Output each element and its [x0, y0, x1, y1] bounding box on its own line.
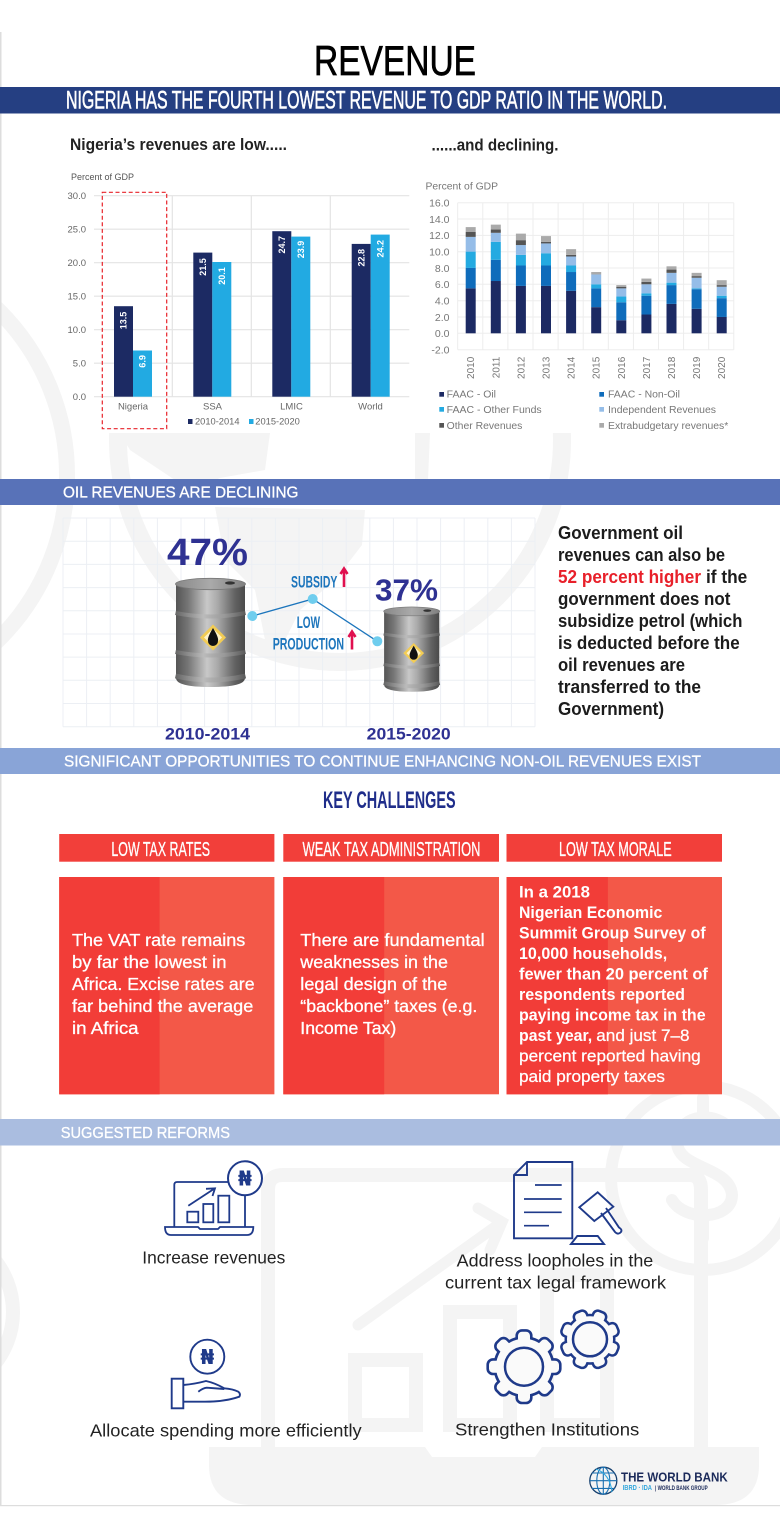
label: subsidy: SUBSIDY [291, 572, 338, 591]
stacked bar chart: revenue composition 2010-2020: 2011 [491, 356, 502, 378]
bar chart: revenues percent of GDP by region [68, 172, 409, 426]
panel: low tax morale: Nigerian Economic [519, 903, 662, 922]
logo: The World Bank: | WORLD BANK GROUP [655, 1486, 708, 1492]
bar chart: revenues percent of GDP by region: 24.7 [277, 236, 288, 254]
text block: petrol subsidy note: is deducted before the [558, 633, 740, 653]
stacked bar chart: revenue composition 2010-2020: 2010 [466, 356, 477, 379]
panel: low tax morale: paid property taxes [519, 1067, 665, 1086]
subheading: declining: ......and declining. [432, 136, 558, 154]
bar chart: revenues percent of GDP by region: 22.8 [356, 249, 367, 266]
label: address loopholes: Address loopholes in the [457, 1251, 653, 1271]
panel: low tax rates: The VAT rate remains [72, 930, 246, 950]
text block: petrol subsidy note: if the [706, 567, 747, 587]
stacked bar chart: revenue composition 2010-2020: Percent of GDP [426, 180, 498, 192]
bar chart: revenues percent of GDP by region: 24.2 [375, 240, 386, 258]
oil revenue share graphic [165, 532, 451, 743]
bar chart: revenues percent of GDP by region: 15.0 [68, 292, 86, 302]
panel: weak tax administration: WEAK TAX ADMINISTRATION [302, 839, 480, 861]
panel: low tax morale [506, 834, 722, 1094]
panel: low tax morale: LOW TAX MORALE [559, 839, 672, 861]
bar chart: revenues percent of GDP by region: 23.9 [296, 241, 307, 258]
label: address loopholes: current tax legal framework [445, 1272, 666, 1292]
panel: low tax rates [59, 834, 274, 1094]
panel: low tax rates: by far the lowest in [72, 952, 226, 972]
panel: low tax morale: paying income tax in the [519, 1006, 706, 1025]
bar chart: revenues percent of GDP by region: 2010-2014 [195, 416, 240, 426]
text block: petrol subsidy note: Government oil [558, 523, 683, 543]
icon: laptop with rising chart: ₦ [238, 1166, 252, 1190]
bar chart: revenues percent of GDP by region: Nigeria [118, 402, 149, 413]
section banner: suggested reforms: SUGGESTED REFORMS [61, 1125, 230, 1142]
panel: low tax rates: Africa. Excise rates are [72, 974, 255, 994]
stat: 47 percent: 47% [167, 532, 248, 574]
text block: petrol subsidy note: 52 percent higher [558, 567, 701, 587]
stacked bar chart: revenue composition 2010-2020: 2012 [516, 356, 527, 379]
icon: gears [489, 1311, 618, 1402]
period label: 2015-2020: 2015-2020 [367, 724, 451, 743]
bar chart: revenues percent of GDP by region: 20.0 [68, 258, 86, 269]
icon: laptop with rising chart [165, 1161, 262, 1235]
stacked bar chart: revenue composition 2010-2020: FAAC - Oil [447, 390, 496, 400]
arrow: subsidy up [340, 568, 348, 587]
logo: The World Bank: THE WORLD BANK [621, 1470, 728, 1485]
icon: large oil barrel [176, 578, 246, 687]
stacked bar chart: revenue composition 2010-2020: 2017 [642, 356, 653, 379]
panel: low tax rates: LOW TAX RATES [111, 839, 210, 861]
stacked bar chart: revenue composition 2010-2020: FAAC - Other Funds [447, 405, 542, 416]
stacked bar chart: revenue composition 2010-2020: 2020 [717, 356, 728, 379]
period label: 2010-2014: 2010-2014 [165, 724, 251, 743]
icon: hand holding coin: ₦ [200, 1345, 214, 1369]
bar chart: revenues percent of GDP by region: LMIC [280, 402, 303, 413]
stacked bar chart: revenue composition 2010-2020 [426, 180, 734, 432]
stacked bar chart: revenue composition 2010-2020: 4.0 [435, 296, 450, 308]
panel: low tax morale: respondents reported [519, 985, 685, 1004]
bar chart: revenues percent of GDP by region: 2015-2020 [255, 416, 300, 426]
bar chart: revenues percent of GDP by region: 13.5 [119, 311, 130, 329]
label: address loopholes [445, 1251, 666, 1292]
icon: small oil barrel [384, 607, 440, 692]
stacked bar chart: revenue composition 2010-2020: 14.0 [429, 214, 450, 226]
text block: petrol subsidy note: transferred to the [558, 677, 701, 697]
label: low production [273, 613, 344, 653]
section banner: suggested reforms [0, 1119, 780, 1146]
bar chart: revenues percent of GDP by region: Percent of GDP [71, 172, 134, 183]
bar chart: revenues percent of GDP by region: 30.0 [68, 191, 86, 202]
panel: low tax morale: fewer than 20 percent of [519, 965, 708, 984]
stacked bar chart: revenue composition 2010-2020: Other Revenues [447, 421, 522, 432]
logo: The World Bank [590, 1467, 728, 1494]
bar chart: revenues percent of GDP by region: SSA [203, 402, 223, 413]
arrow: production up [348, 632, 356, 650]
icon: globe [590, 1467, 617, 1494]
stacked bar chart: revenue composition 2010-2020: 16.0 [429, 198, 450, 210]
bar chart: revenues percent of GDP by region: 21.5 [198, 258, 209, 276]
stacked bar chart: revenue composition 2010-2020: 2015 [592, 356, 603, 379]
callout: Nigeria dashed highlight [102, 192, 167, 429]
stacked bar chart: revenue composition 2010-2020: FAAC - Non-Oil [608, 390, 680, 400]
text block: petrol subsidy note: oil revenues are [558, 655, 685, 675]
panel: low tax rates: far behind the average [72, 996, 253, 1016]
panel: weak tax administration: legal design of the [300, 974, 447, 994]
stacked bar chart: revenue composition 2010-2020: 12.0 [429, 230, 450, 242]
stacked bar chart: revenue composition 2010-2020: 6.0 [435, 279, 450, 291]
stacked bar chart: revenue composition 2010-2020: 2018 [667, 356, 678, 379]
stacked bar chart: revenue composition 2010-2020: -2.0 [431, 344, 450, 356]
panel: weak tax administration [283, 834, 499, 1094]
stacked bar chart: revenue composition 2010-2020: Extrabudgetary revenues* [608, 421, 728, 432]
bar chart: revenues percent of GDP by region: 6.9 [138, 355, 149, 368]
label: allocate spending: Allocate spending more efficiently [90, 1421, 362, 1441]
trend line with dots [247, 594, 382, 646]
panel: low tax morale: In a 2018 [519, 882, 590, 901]
bar chart: revenues percent of GDP by region: 10.0 [68, 325, 86, 336]
text block: petrol subsidy note: revenues can also be [558, 545, 725, 565]
stacked bar chart: revenue composition 2010-2020: 2014 [567, 356, 578, 379]
stacked bar chart: revenue composition 2010-2020: 8.0 [435, 263, 450, 275]
panel: low tax morale: Summit Group Survey of [519, 924, 706, 943]
section banner: non-oil opportunities: SIGNIFICANT OPPORTUNITIES TO CONTINUE ENHANCING NON-OIL REVENUES EXIST [64, 754, 702, 770]
icon: document and gavel [514, 1162, 621, 1244]
icon: hand holding coin [172, 1340, 240, 1408]
panel: weak tax administration: There are fundamental [300, 930, 485, 950]
section banner: oil revenues: OIL REVENUES ARE DECLINING [63, 484, 298, 501]
panel: weak tax administration: “backbone” taxes (e.g. [300, 996, 477, 1016]
logo: The World Bank: IBRD · IDA [623, 1483, 652, 1492]
label: low production: LOW [297, 613, 321, 632]
bar chart: revenues percent of GDP by region: 0.0 [73, 392, 86, 403]
title: REVENUE [314, 37, 476, 84]
bar chart: revenues percent of GDP by region: 5.0 [73, 358, 86, 370]
panel: low tax morale: percent reported having [519, 1047, 701, 1066]
label: increase revenues: Increase revenues [142, 1247, 286, 1267]
stacked bar chart: revenue composition 2010-2020: 0.0 [435, 328, 450, 340]
stacked bar chart: revenue composition 2010-2020: 10.0 [429, 246, 450, 258]
panel: weak tax administration: Income Tax) [300, 1018, 396, 1038]
stacked bar chart: revenue composition 2010-2020: 2019 [692, 356, 703, 379]
stacked bar chart: revenue composition 2010-2020: 2016 [617, 356, 628, 379]
panel: weak tax administration: weaknesses in the [299, 952, 448, 972]
label: strengthen institutions: Strengthen Institutions [455, 1420, 640, 1440]
text block: petrol subsidy note: subsidize petrol (which [558, 611, 742, 631]
stacked bar chart: revenue composition 2010-2020: Independent Revenues [608, 405, 716, 416]
panel: low tax morale: and just 7–8 [596, 1026, 690, 1045]
stat: 37 percent: 37% [375, 573, 438, 608]
stacked bar chart: revenue composition 2010-2020: 2013 [542, 356, 552, 379]
text block: petrol subsidy note [558, 523, 747, 719]
panel: low tax rates: in Africa [72, 1018, 139, 1038]
bar chart: revenues percent of GDP by region: World [358, 402, 383, 413]
stacked bar chart: revenue composition 2010-2020: 2.0 [435, 312, 450, 324]
bar chart: revenues percent of GDP by region: 25.0 [68, 224, 86, 236]
section banner: oil revenues [0, 479, 780, 505]
section banner: non-oil opportunities [0, 748, 780, 774]
text block: petrol subsidy note: Government) [558, 699, 664, 719]
heading: key challenges: KEY CHALLENGES [323, 787, 456, 814]
label: low production: PRODUCTION [273, 634, 344, 653]
panel: low tax morale: 10,000 households, [519, 944, 667, 963]
bar chart: revenues percent of GDP by region: 20.1 [217, 267, 228, 285]
panel: low tax morale: past year, [519, 1026, 592, 1045]
text block: petrol subsidy note: government does not [558, 589, 730, 609]
subheading: low revenues: Nigeria’s revenues are low..... [70, 135, 287, 154]
